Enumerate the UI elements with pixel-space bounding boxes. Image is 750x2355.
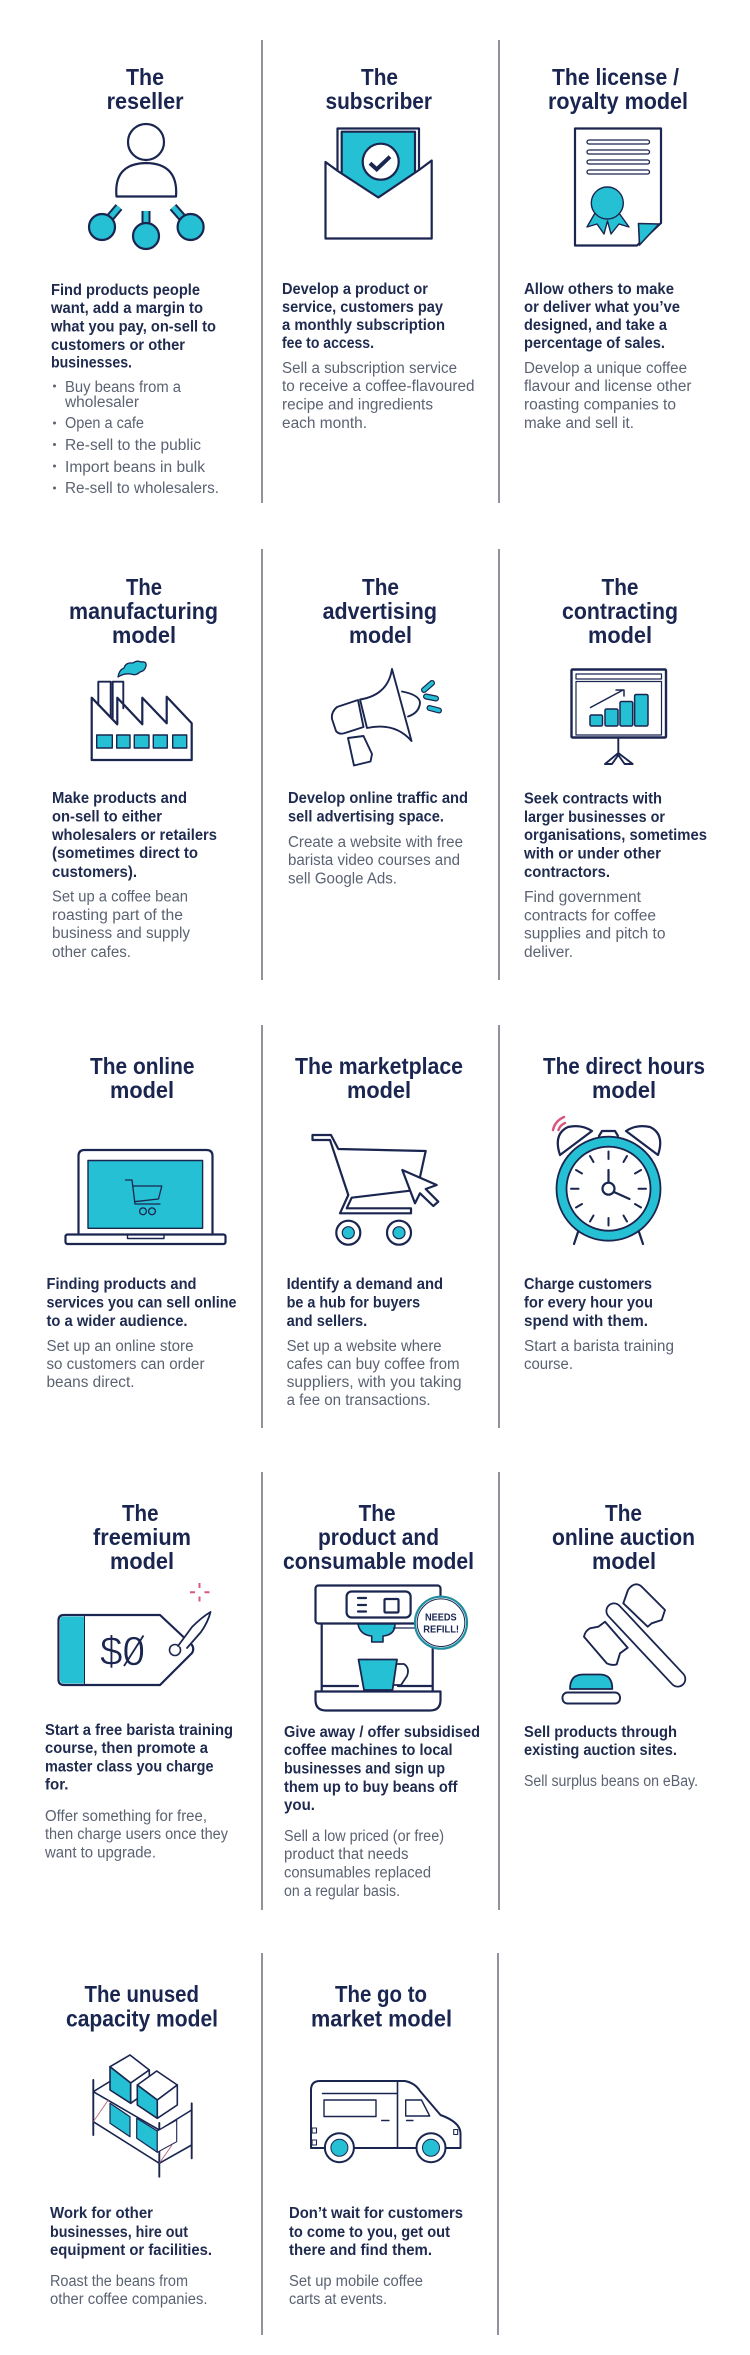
icon: coffee machine with refill badge: [316, 1586, 467, 1710]
badge: needs refill: REFILL!: [423, 1624, 459, 1636]
list: reseller examples: Buy beans from a: [65, 379, 181, 396]
text: freemium summary: [45, 1722, 233, 1794]
text: reseller summary: what you pay, on-sell to: [50, 318, 216, 336]
text: contracting summary: larger businesses or: [524, 809, 665, 826]
heading: freemium: freemium: [93, 1524, 191, 1550]
text: marketplace example: Set up a website where: [287, 1338, 442, 1355]
heading: license / royalty: The license /: [552, 64, 680, 90]
text: unused capacity summary: [50, 2205, 212, 2259]
panel: the direct hours model: [524, 1053, 705, 1373]
text: go to market example: [289, 2273, 423, 2308]
panel: the go to market model: [289, 1981, 463, 2308]
heading: unused capacity: The unused: [84, 1981, 199, 2007]
heading: online: model: [110, 1077, 174, 1103]
heading: advertising: model: [349, 622, 412, 648]
text: marketplace summary: be a hub for buyers: [287, 1294, 420, 1312]
text: license example: make and sell it.: [524, 415, 634, 432]
text: manufacturing example: roasting part of the: [52, 907, 183, 924]
heading: direct hours: [543, 1053, 705, 1103]
text: product and consumable example: Sell a low priced (or free): [284, 1828, 444, 1845]
text: go to market summary: Don’t wait for customers: [289, 2205, 463, 2222]
heading: freemium: [93, 1500, 191, 1574]
icon: person with network nodes: [89, 124, 204, 249]
text: freemium example: then charge users once they: [45, 1826, 228, 1843]
icon: certificate document: [575, 128, 661, 246]
heading: go to market: [311, 1981, 452, 2032]
badge: needs refill: NEEDS: [425, 1612, 457, 1624]
panel: the contracting model: [523, 574, 707, 961]
text: license summary: designed, and take a: [524, 317, 667, 334]
list: reseller examples: [53, 379, 219, 497]
text: contracting summary: [523, 790, 707, 881]
text: marketplace summary: and sellers.: [287, 1313, 367, 1330]
text: manufacturing example: other cafes.: [52, 944, 131, 961]
heading: license / royalty: [548, 64, 688, 114]
heading: go to market: market model: [311, 2006, 452, 2032]
text: go to market summary: to come to you, get out: [289, 2224, 450, 2241]
text: online example: beans direct.: [46, 1374, 134, 1391]
text: contracting summary: organisations, sometimes: [524, 827, 707, 844]
text: direct hours summary: spend with them.: [524, 1313, 648, 1330]
text: manufacturing example: [52, 888, 190, 961]
text: contracting summary: with or under other: [523, 846, 661, 862]
text: marketplace example: a fee on transactions.: [287, 1392, 431, 1409]
text: online example: [46, 1338, 204, 1391]
text: manufacturing summary: (sometimes direct to: [52, 845, 198, 862]
text: contracting summary: contractors.: [524, 864, 610, 881]
text: manufacturing summary: customers).: [52, 864, 137, 881]
text: freemium summary: course, then promote a: [45, 1740, 208, 1757]
text: subscriber summary: a monthly subscription: [282, 317, 445, 334]
text: contracting summary: Seek contracts with: [524, 790, 662, 808]
list: reseller examples: wholesaler: [64, 394, 139, 411]
heading: product and consumable: [283, 1500, 474, 1574]
text: direct hours summary: [524, 1276, 653, 1330]
heading: the reseller: The: [126, 64, 164, 90]
text: go to market summary: [289, 2205, 463, 2259]
heading: product and consumable: product and: [318, 1524, 439, 1550]
heading: freemium: model: [110, 1548, 174, 1574]
text: manufacturing summary: [51, 790, 217, 881]
text: advertising summary: Develop online traffic and: [288, 790, 468, 807]
text: freemium summary: for.: [45, 1776, 68, 1794]
heading: freemium: The: [122, 1500, 158, 1526]
heading: go to market: The go to: [335, 1981, 427, 2007]
panel: the advertising model: [288, 574, 468, 888]
heading: marketplace: The marketplace: [295, 1053, 463, 1079]
text: subscriber summary: fee to access.: [282, 335, 374, 352]
text: advertising summary: sell advertising space.: [288, 808, 444, 826]
heading: the reseller: reseller: [107, 88, 184, 114]
panel: the reseller: [50, 64, 219, 497]
icon: presentation board: [572, 670, 666, 764]
text: go to market example: Set up mobile coffee: [289, 2273, 423, 2290]
icon: gavel: [562, 1584, 678, 1704]
text: direct hours summary: Charge customers: [524, 1276, 652, 1293]
text: contracting example: contracts for coffee: [524, 908, 656, 924]
text: direct hours example: course.: [524, 1356, 573, 1373]
heading: license / royalty: royalty model: [548, 88, 688, 114]
text: go to market summary: there and find them.: [289, 2242, 432, 2259]
heading: marketplace: model: [347, 1077, 411, 1103]
heading: direct hours: The direct hours: [543, 1053, 705, 1079]
text: unused capacity summary: Work for other: [50, 2205, 153, 2222]
text: product and consumable summary: coffee machines to local: [284, 1742, 452, 1759]
panel: the subscriber: [282, 64, 474, 432]
text: subscriber example: recipe and ingredients: [282, 396, 433, 414]
icon: megaphone: [332, 669, 439, 766]
panel: the online auction model: [524, 1500, 698, 1790]
heading: online auction: The: [605, 1500, 642, 1526]
panel: the product and consumable model: [283, 1500, 480, 1900]
text: advertising summary: [288, 790, 468, 826]
text: freemium example: [44, 1808, 228, 1862]
icon: warehouse shelving with boxes: [93, 2055, 192, 2177]
heading: contracting: [562, 574, 678, 648]
text: subscriber summary: service, customers pay: [282, 299, 443, 316]
icon: alarm clock: [553, 1117, 660, 1244]
text: direct hours example: Start a barista training: [524, 1338, 674, 1355]
heading: online auction: model: [592, 1548, 656, 1574]
text: advertising example: [288, 834, 463, 888]
text: freemium example: Offer something for free,: [45, 1808, 207, 1825]
text: freemium summary: master class you charge: [45, 1758, 214, 1776]
panel: the manufacturing model: [51, 574, 218, 961]
text: subscriber summary: [282, 281, 445, 352]
icon: price tag with $0: $0: [100, 1628, 145, 1674]
heading: manufacturing: model: [112, 622, 176, 648]
text: advertising example: barista video courses and: [288, 852, 460, 869]
panel: the freemium model: [44, 1500, 233, 1862]
icon: factory: [92, 661, 192, 760]
text: reseller summary: [50, 282, 216, 372]
text: product and consumable example: product that needs: [284, 1846, 409, 1863]
text: online summary: to a wider audience.: [46, 1313, 188, 1330]
text: manufacturing example: business and supply: [52, 925, 190, 942]
icon: delivery van: [311, 2081, 460, 2162]
icon: shopping cart with cursor: [312, 1135, 438, 1245]
text: online auction example: Sell surplus beans on eBay.: [524, 1773, 698, 1790]
heading: contracting: model: [588, 622, 652, 648]
text: contracting example: deliver.: [524, 944, 573, 961]
text: marketplace example: cafes can buy coffee from: [287, 1356, 460, 1373]
heading: contracting: contracting: [562, 598, 678, 624]
text: contracting example: supplies and pitch to: [524, 926, 666, 942]
text: manufacturing summary: wholesalers or retailers: [51, 827, 217, 844]
text: product and consumable summary: them up to buy beans off: [284, 1779, 458, 1796]
text: unused capacity example: Roast the beans from: [50, 2273, 188, 2290]
text: reseller summary: customers or other: [51, 337, 185, 354]
list: reseller examples: Open a cafe: [65, 415, 144, 432]
text: product and consumable summary: [284, 1724, 480, 1814]
text: license example: [524, 360, 692, 432]
panel: the unused capacity model: [50, 1981, 218, 2308]
heading: direct hours: model: [592, 1077, 656, 1103]
text: product and consumable example: [284, 1828, 444, 1900]
text: online summary: [46, 1276, 237, 1330]
heading: the subscriber: The: [361, 64, 398, 90]
text: subscriber example: [282, 360, 474, 432]
text: unused capacity summary: equipment or facilities.: [50, 2242, 212, 2259]
heading: online auction: [552, 1500, 695, 1574]
text: advertising example: sell Google Ads.: [288, 870, 397, 888]
list: reseller examples: Import beans in bulk: [65, 459, 205, 476]
text: subscriber summary: Develop a product or: [282, 281, 428, 298]
heading: online: The online: [90, 1053, 194, 1079]
heading: marketplace: [295, 1053, 463, 1103]
text: go to market example: carts at events.: [289, 2291, 387, 2308]
text: manufacturing summary: on-sell to either: [52, 808, 162, 826]
icon: envelope with check: [326, 128, 432, 238]
text: license summary: or deliver what you’ve: [524, 299, 680, 316]
text: online auction summary: Sell products through: [524, 1724, 677, 1741]
heading: advertising: advertising: [323, 598, 437, 624]
text: subscriber example: Sell a subscription service: [282, 360, 457, 377]
text: online example: Set up an online store: [46, 1338, 194, 1355]
list: reseller examples: Re-sell to wholesalers.: [65, 480, 219, 497]
text: manufacturing summary: Make products and: [52, 790, 187, 807]
text: subscriber example: to receive a coffee-flavoured: [282, 378, 474, 395]
text: contracting example: Find government: [524, 889, 642, 906]
text: direct hours summary: for every hour you: [524, 1294, 653, 1312]
text: marketplace summary: [287, 1276, 443, 1330]
text: product and consumable summary: businesses and sign up: [284, 1760, 445, 1778]
heading: advertising: [323, 574, 437, 648]
text: online auction summary: [524, 1724, 677, 1759]
text: online example: so customers can order: [46, 1356, 204, 1373]
icon: laptop with cart: [66, 1150, 226, 1244]
text: license summary: Allow others to make: [524, 281, 674, 298]
list: reseller examples: Re-sell to the public: [65, 437, 201, 454]
text: license summary: percentage of sales.: [524, 335, 665, 352]
text: manufacturing example: Set up a coffee bean: [52, 888, 188, 906]
text: reseller summary: Find products people: [51, 282, 200, 299]
text: advertising example: Create a website with free: [288, 834, 463, 851]
heading: product and consumable: The: [359, 1500, 396, 1526]
heading: manufacturing: manufacturing: [69, 598, 218, 624]
panel: the license / royalty model: [524, 64, 692, 432]
text: license example: flavour and license other: [524, 378, 692, 395]
text: unused capacity example: [50, 2273, 208, 2308]
text: online summary: Finding products and: [46, 1276, 196, 1293]
text: product and consumable example: on a regular basis.: [284, 1883, 400, 1900]
text: license summary: [524, 281, 680, 352]
heading: unused capacity: [66, 1981, 218, 2032]
text: freemium summary: Start a free barista training: [45, 1722, 233, 1739]
text: unused capacity summary: businesses, hire out: [50, 2224, 188, 2241]
text: online summary: services you can sell online: [46, 1294, 237, 1312]
text: online auction summary: existing auction sites.: [524, 1742, 677, 1759]
text: reseller summary: want, add a margin to: [50, 300, 203, 317]
text: product and consumable summary: Give away / offer subsidised: [284, 1724, 480, 1741]
text: product and consumable example: consumables replaced: [284, 1864, 431, 1882]
text: license example: Develop a unique coffee: [524, 360, 687, 377]
heading: manufacturing: [69, 574, 218, 648]
badge: needs refill: [415, 1597, 467, 1649]
icon: price tag with $0: [58, 1583, 210, 1685]
heading: contracting: The: [602, 574, 638, 600]
heading: the subscriber: subscriber: [326, 88, 432, 114]
heading: manufacturing: The: [126, 574, 162, 600]
text: freemium example: want to upgrade.: [44, 1844, 156, 1862]
text: reseller summary: businesses.: [51, 354, 132, 372]
text: marketplace summary: Identify a demand and: [287, 1276, 443, 1293]
text: subscriber example: each month.: [282, 415, 367, 432]
panel: the online model: [46, 1053, 237, 1391]
text: unused capacity example: other coffee companies.: [50, 2291, 208, 2308]
text: direct hours example: [524, 1338, 674, 1373]
heading: online auction: online auction: [552, 1524, 695, 1550]
heading: product and consumable: consumable model: [283, 1548, 474, 1574]
text: license example: roasting companies to: [524, 396, 676, 414]
text: contracting example: [524, 889, 666, 961]
heading: the subscriber: [326, 64, 432, 114]
text: marketplace example: [287, 1338, 462, 1409]
text: marketplace example: suppliers, with you taking: [287, 1374, 462, 1391]
text: product and consumable summary: you.: [284, 1797, 315, 1814]
heading: unused capacity: capacity model: [66, 2006, 218, 2032]
heading: advertising: The: [362, 574, 399, 600]
heading: the reseller: [107, 64, 184, 114]
heading: online: [90, 1053, 194, 1103]
panel: the marketplace model: [287, 1053, 463, 1409]
